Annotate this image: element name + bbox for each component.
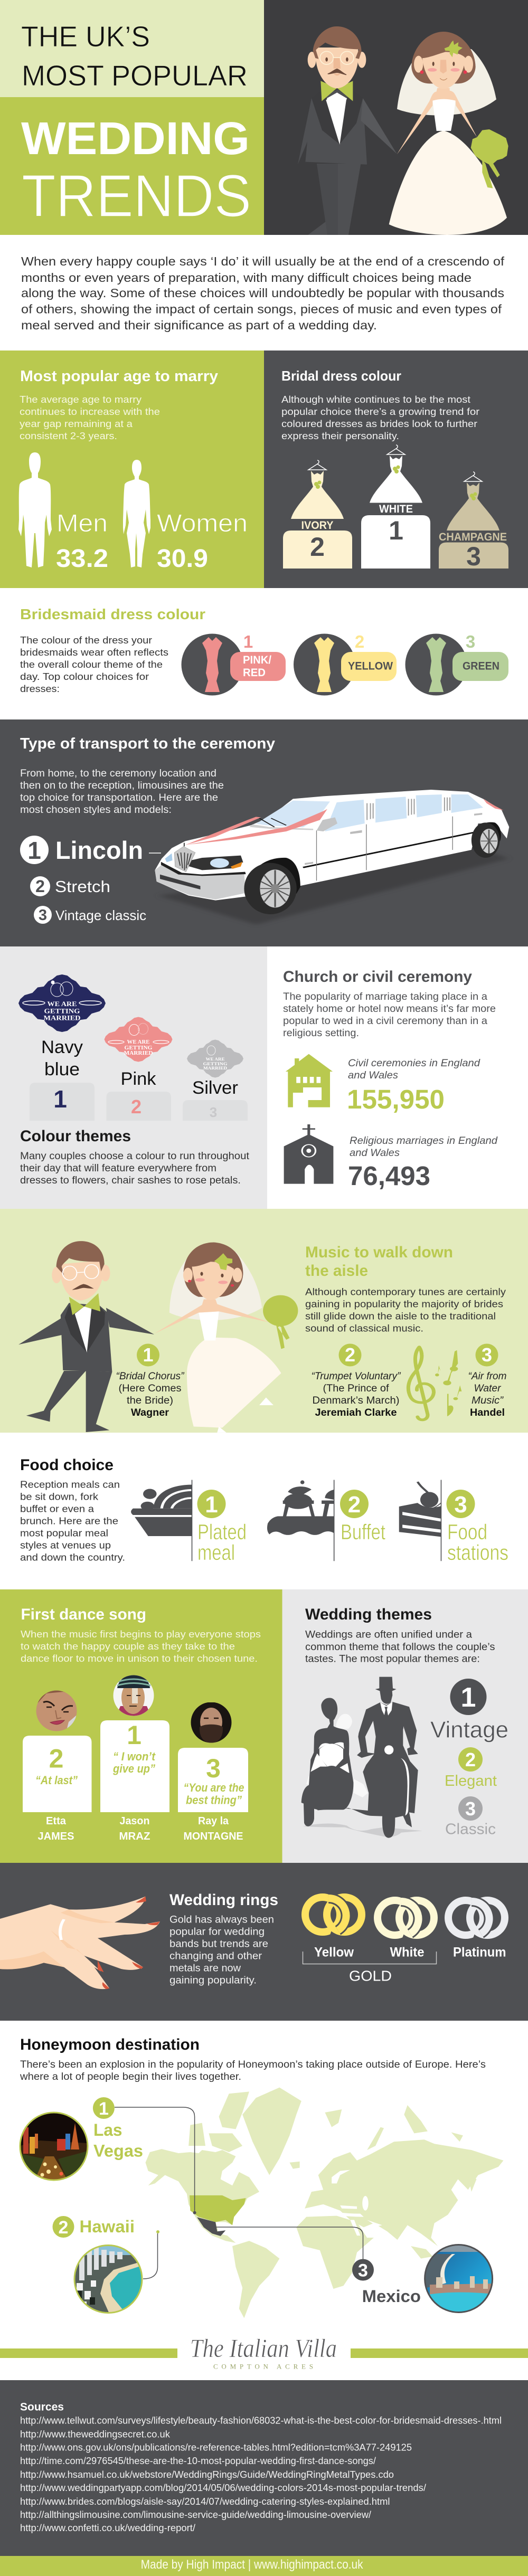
title line: The UK's: THE UK’S	[21, 20, 150, 53]
badge: silver	[183, 1040, 248, 1121]
body text: gaining popularity.	[169, 1975, 257, 1986]
track 1: Wagner: “Bridal Chorus”	[116, 1371, 185, 1382]
body text: continues to increase with the	[20, 406, 160, 417]
theme 2: elegant	[445, 1747, 497, 1789]
map highlight: USA	[190, 2195, 246, 2225]
badge: navy blue: WE ARE	[48, 1000, 77, 1008]
rank 1: Lincoln	[20, 836, 161, 864]
body text	[305, 1629, 495, 1665]
podium: white dress rank 1: 1	[389, 516, 403, 545]
track 1: Wagner: 1	[143, 1344, 154, 1366]
podium: Jason Mraz, I won't give up	[100, 1720, 169, 1842]
icon: house	[286, 1054, 333, 1107]
body text: their day that will feature everywhere from	[20, 1163, 216, 1174]
body text: sound of classical music.	[305, 1323, 423, 1333]
badge: navy blue: blue	[44, 1059, 80, 1079]
body text: brunch. Here are the	[20, 1515, 118, 1527]
body text: most chosen styles and models:	[20, 804, 172, 816]
icon: cake	[399, 1480, 441, 1561]
body text: dresses to flowers, chair sashes to rose petals.	[20, 1175, 241, 1186]
body text	[20, 394, 160, 441]
body text: most popular meal	[20, 1528, 108, 1538]
track 3: Handel: 3	[482, 1344, 492, 1366]
option: pink/red dress: PINK/	[243, 654, 271, 666]
podium: Etta James, At last: 2	[49, 1744, 63, 1774]
track 1: Wagner: (Here Comes	[118, 1383, 182, 1394]
badge: navy blue: GETTING	[44, 1007, 80, 1015]
section: honeymoon destination	[20, 2036, 503, 2318]
option: buffet: 2	[348, 1492, 361, 1518]
badge: silver: Silver	[192, 1078, 238, 1098]
body text: bridesmaids wear often reflects	[20, 647, 168, 658]
body text: The average age to marry	[20, 394, 142, 405]
track 2: Jeremiah Clarke: Jeremiah Clarke	[315, 1407, 397, 1418]
podium: champagne dress rank 3	[439, 472, 508, 571]
heading: Most popular age to marry	[20, 368, 218, 385]
body text: popular choice there’s a growing trend for	[281, 406, 479, 417]
track 3: Handel: Water	[474, 1383, 501, 1394]
header panel: title	[0, 0, 264, 235]
panel: wedding rings	[0, 1863, 528, 2021]
title line: Most Popular: MOST POPULAR	[22, 59, 248, 92]
body text: dance floor to move in unison to their chosen tune.	[21, 1653, 258, 1664]
podium: Jason Mraz, I won't give up: give up”	[112, 1762, 155, 1775]
theme 3: classic: Classic	[445, 1821, 496, 1838]
body text	[283, 991, 496, 1039]
stat: religious marriages	[348, 1135, 498, 1191]
option: pink/red dress	[182, 632, 286, 696]
rank 2: Stretch	[30, 876, 110, 896]
icon: white gold rings	[378, 1900, 434, 1936]
podium: ivory dress rank 2	[283, 460, 352, 569]
body text	[20, 2059, 486, 2082]
destination 3: Mexico: 3	[358, 2260, 368, 2280]
logo wordmark: The Italian Villa	[190, 2333, 337, 2363]
body text: buffet or even a	[20, 1503, 95, 1514]
badge: silver: 3	[210, 1104, 217, 1120]
body text: The colour of the dress your	[20, 634, 152, 646]
body text: where a lot of people begin their lives together.	[20, 2071, 241, 2082]
logo tagline: COMPTON ACRES	[213, 2363, 313, 2371]
track 1: Wagner: Wagner	[131, 1407, 169, 1418]
body text: consistent 2-3 years.	[20, 430, 117, 441]
body text: There’s been an explosion in the popularity of Honeymoon’s taking place outside of Europe. Here’s	[20, 2059, 486, 2070]
intro paragraph: of others, showing the impact of certain songs, pieces of music and even types of	[21, 302, 502, 316]
stat: civil ceremonies	[347, 1058, 481, 1114]
podium: Jason Mraz, I won't give up: “ I won’t	[113, 1750, 156, 1763]
body text: Many couples choose a colour to run throughout	[20, 1151, 250, 1162]
body text: Although contemporary tunes are certainly	[305, 1286, 506, 1298]
podium: white dress rank 1: WHITE	[379, 503, 413, 515]
podium: ivory dress rank 2: 2	[310, 532, 325, 562]
panel: type of transport to the ceremony	[0, 719, 528, 946]
body text: The popularity of marriage taking place in a	[283, 991, 487, 1002]
heading: Honeymoon destination	[20, 2036, 200, 2053]
intro paragraph: months or even years of preparation, with many difficult choices being made	[21, 271, 472, 285]
body text	[305, 1286, 506, 1333]
podium: Ray la Montagne, You are the best thing: “You are the	[184, 1781, 244, 1794]
badge: pink: WE ARE	[127, 1039, 150, 1045]
intro paragraph	[21, 254, 505, 332]
theme 1: vintage: Vintage	[430, 1717, 508, 1743]
photo: Mexico	[425, 2244, 493, 2315]
icon: woman silhouette	[123, 460, 150, 567]
rank 3: Vintage classic: 3	[39, 907, 47, 924]
logo band: The Italian Villa	[0, 2333, 528, 2371]
body text: changing and other	[169, 1951, 262, 1962]
source list: http://www.ons.gov.uk/ons/publications/re-reference-tables.html?edition=tcm%3A77-249125	[20, 2442, 412, 2453]
body text: Weddings are often unified under a	[305, 1629, 472, 1641]
badge: navy blue	[18, 974, 106, 1121]
body text	[169, 1915, 274, 1986]
world map	[146, 2087, 503, 2318]
stat: religious marriages: and Wales	[350, 1148, 400, 1159]
badge: navy blue: 1	[53, 1085, 67, 1113]
section: bridesmaid dress colour	[20, 606, 508, 696]
panel: wedding themes	[282, 1589, 528, 1863]
icon: music notes	[408, 1347, 461, 1420]
footer credit bar	[0, 2556, 528, 2576]
source list: http://www.weddingpartyapp.com/blog/2014/05/06/wedding-colors-2014s-most-popular-trends/	[20, 2482, 427, 2493]
badge: pink: Pink	[120, 1069, 157, 1089]
badge: pink	[105, 1017, 172, 1121]
body text: styles at venues up	[20, 1539, 111, 1551]
icon: church	[284, 1124, 333, 1184]
rank 3: Vintage classic: Vintage classic	[55, 907, 146, 923]
option: pink/red dress: RED	[243, 667, 266, 679]
option: yellow dress: 2	[355, 632, 364, 651]
stat: women age: 30.9	[157, 545, 208, 573]
body text: common theme that follows the couple’s	[305, 1642, 495, 1653]
heading: Sources	[20, 2401, 64, 2413]
track 1: Wagner: the Bride)	[127, 1395, 173, 1406]
map highlight: Mexico	[197, 2217, 225, 2236]
body text	[20, 1151, 250, 1186]
connector: Mexico	[215, 2227, 363, 2259]
body text: year gap remaining at a	[20, 418, 133, 429]
option: yellow dress	[294, 632, 397, 696]
destination 2: Hawaii: 2	[59, 2218, 68, 2238]
heading: Bridal dress colour	[281, 368, 401, 384]
podium: ivory dress rank 2: IVORY	[301, 519, 334, 532]
stat: civil ceremonies: 155,950	[347, 1084, 445, 1114]
marker: Las Vegas	[193, 2211, 196, 2214]
stat: civil ceremonies: and Wales	[348, 1070, 399, 1081]
badge: silver: GETTING	[203, 1061, 228, 1066]
header panel: illustrated couple	[264, 0, 528, 235]
body text: day. Top colour choices for	[20, 671, 149, 682]
option: plated meal: Plated	[197, 1520, 247, 1544]
body text: be sit down, fork	[20, 1491, 99, 1502]
podium: champagne dress rank 3: 3	[466, 542, 481, 571]
body text: Although white continues to be the most	[281, 394, 470, 405]
panel: sources	[0, 2380, 528, 2556]
destination 3: Mexico: Mexico	[362, 2287, 421, 2306]
heading: Type of transport to the ceremony	[20, 735, 275, 752]
body text: tastes. The most popular themes are:	[305, 1653, 480, 1665]
option: green dress: 3	[466, 632, 475, 651]
option: green dress: GREEN	[463, 660, 499, 673]
track 2: Jeremiah Clarke: (The Prince of	[323, 1383, 389, 1394]
intro paragraph: When every happy couple says ‘I do’ it will usually be at the end of a crescendo of	[21, 254, 505, 268]
label: white: White	[390, 1945, 425, 1960]
source list: http://www.theweddingsecret.co.uk	[20, 2429, 171, 2440]
badge: pink: GETTING	[125, 1045, 153, 1051]
heading second line: the aisle	[305, 1262, 368, 1280]
theme 3: classic: 3	[465, 1798, 476, 1820]
source list: http://www.brides.com/blogs/aisle-say/2014/07/wedding-catering-styles-explained.html	[20, 2496, 390, 2507]
option: buffet: Buffet	[341, 1520, 385, 1544]
badge: navy blue: MARRIED	[43, 1014, 80, 1022]
section: church or civil ceremony	[283, 968, 498, 1191]
body text: From home, to the ceremony location and	[20, 768, 216, 779]
source list: http://time.com/2976545/these-are-the-10-most-popular-wedding-first-dance-songs/	[20, 2455, 376, 2466]
track 1: Wagner	[116, 1344, 185, 1418]
body text	[20, 634, 168, 694]
track 3: Handel: Handel	[470, 1407, 505, 1418]
badge: pink: MARRIED	[124, 1050, 153, 1056]
body text: coloured dresses as brides look to further	[281, 418, 477, 429]
body text: still glide down the aisle to the traditional	[305, 1310, 496, 1322]
stat: religious marriages: 76,493	[348, 1161, 430, 1191]
track 3: Handel	[468, 1344, 507, 1418]
rank 1: Lincoln: Lincoln	[55, 836, 143, 864]
rank 2: Stretch: Stretch	[55, 877, 110, 896]
podium: Ray la Montagne, You are the best thing: best thing”	[186, 1794, 242, 1806]
theme 1: vintage	[430, 1679, 508, 1743]
body text: When the music first begins to play everyone stops	[21, 1628, 261, 1640]
body text: metals are now	[169, 1963, 241, 1974]
option: food stations	[447, 1490, 508, 1565]
destination 3: Mexico	[352, 2259, 421, 2306]
destination 1: Las Vegas	[93, 2097, 143, 2161]
option: buffet	[340, 1490, 385, 1544]
option: yellow dress: YELLOW	[348, 660, 393, 673]
heading: Music to walk down	[305, 1244, 453, 1261]
label: gold: GOLD	[349, 1968, 392, 1984]
badge: navy blue: Navy	[41, 1037, 83, 1057]
option: plated meal: 1	[205, 1492, 218, 1518]
destination 2: Hawaii: Hawaii	[79, 2217, 135, 2236]
panel: colour themes	[0, 946, 267, 1209]
icon: platinum rings	[448, 1900, 505, 1936]
option: plated meal	[197, 1490, 247, 1565]
illustration: white limousine	[155, 790, 509, 925]
podium: white dress rank 1	[361, 445, 430, 569]
track 2: Jeremiah Clarke	[312, 1344, 401, 1418]
label: men: Men	[56, 509, 108, 537]
portrait: Ray LaMontagne	[191, 1702, 232, 1744]
theme 2: elegant: Elegant	[445, 1773, 497, 1789]
track 2: Jeremiah Clarke: Denmark’s March)	[313, 1395, 399, 1406]
body text: Gold has always been	[169, 1915, 274, 1926]
rank 2: Stretch: 2	[35, 877, 45, 896]
option: plated meal: meal	[197, 1540, 235, 1565]
panel: music to walk down the aisle	[0, 1209, 528, 1433]
body text: to watch the happy couple as they take to the	[21, 1641, 235, 1652]
heading: First dance song	[21, 1606, 146, 1623]
source list: http://allthingslimousine.com/limousine-service-guide/wedding-limousine-overview/	[20, 2509, 372, 2520]
destination 1: Las Vegas: Las	[93, 2120, 122, 2139]
label: platinum: Platinum	[453, 1945, 506, 1960]
heading: Bridesmaid dress colour	[20, 606, 205, 622]
theme 2: elegant: 2	[465, 1749, 476, 1770]
podium: champagne dress rank 3: CHAMPAGNE	[439, 531, 507, 543]
podium: Ray la Montagne, You are the best thing: MONTAGNE	[184, 1831, 243, 1842]
theme 3: classic	[445, 1796, 496, 1838]
stat: men age: 33.2	[56, 545, 108, 573]
destination 2: Hawaii	[53, 2216, 135, 2238]
track 3: Handel: “Air from	[468, 1371, 507, 1382]
body text: religious setting.	[283, 1028, 359, 1039]
footer credit bar: Made by High Impact | www.highimpact.co.uk	[141, 2558, 363, 2572]
bracket: gold	[303, 1952, 436, 1964]
panel: bridal dress colour	[264, 351, 528, 588]
podium: Jason Mraz, I won't give up: 1	[127, 1720, 142, 1750]
source list: http://www.hsamuel.co.uk/webstore/WeddingRings/Guide/WeddingRingMetalTypes.cdo	[20, 2469, 394, 2480]
body text: popular for wedding	[169, 1927, 265, 1938]
rank 1: Lincoln: 1	[27, 837, 41, 864]
body text: express their personality.	[281, 430, 399, 441]
podium: Etta James, At last	[23, 1736, 92, 1842]
source list: http://www.confetti.co.uk/wedding-report/	[20, 2522, 196, 2533]
body text	[281, 394, 479, 441]
track 3: Handel: Music”	[472, 1395, 504, 1406]
panel: most popular age to marry	[0, 351, 264, 588]
heading: Wedding themes	[305, 1606, 432, 1623]
body text: Reception meals can	[20, 1479, 120, 1490]
stat: religious marriages: Religious marriages in England	[350, 1135, 498, 1147]
podium: Etta James, At last: “At last”	[35, 1774, 78, 1787]
podium: Ray la Montagne, You are the best thing: 3	[206, 1754, 221, 1783]
icon: man silhouette	[18, 452, 52, 567]
portrait: Etta James	[36, 1690, 79, 1732]
title line: Wedding: WEDDING	[21, 113, 250, 164]
body text: and down the country.	[20, 1552, 125, 1562]
heading: Church or civil ceremony	[283, 968, 472, 986]
podium: Ray la Montagne, You are the best thing: Ray la	[198, 1815, 229, 1827]
illustration: couple on scooter with sidecar	[301, 1677, 422, 1838]
photo: Las Vegas	[20, 2113, 88, 2180]
option: food stations: 3	[454, 1492, 467, 1518]
photo: Hawaii	[74, 2245, 142, 2315]
label: yellow: Yellow	[314, 1945, 354, 1960]
illustration: groom walking	[18, 1241, 154, 1432]
body text: popular to wed in a civil ceremony than in a	[283, 1016, 487, 1027]
badge: silver: WE ARE	[206, 1056, 225, 1062]
body text: top choice for transportation. Here are the	[20, 792, 218, 803]
source list	[20, 2415, 502, 2533]
connector: Hawaii	[143, 2233, 157, 2279]
intro paragraph: meal served and their significance as part of a wedding day.	[21, 318, 377, 332]
body text: the overall colour theme of the	[20, 659, 163, 670]
body text: gaining in popularity the majority of brides	[305, 1299, 503, 1309]
icon: yellow gold rings	[305, 1897, 362, 1933]
body text: dresses:	[20, 683, 60, 694]
option: food stations: Food	[447, 1520, 487, 1544]
destination 1: Las Vegas: Vegas	[93, 2142, 143, 2161]
body text	[21, 1628, 261, 1664]
body text: stately home or hotel now means it’s far more	[283, 1003, 496, 1015]
podium: Jason Mraz, I won't give up: MRAZ	[119, 1831, 150, 1842]
podium: Etta James, At last: Etta	[46, 1815, 67, 1827]
icon: plated meal	[131, 1480, 192, 1561]
icon: buffet	[267, 1480, 334, 1561]
body text: then on to the reception, limousines are the	[20, 780, 224, 791]
badge: pink: 2	[131, 1096, 142, 1117]
label: women: Women	[157, 509, 248, 537]
body text: bands but trends are	[169, 1939, 268, 1950]
portrait: Jason Mraz	[113, 1674, 154, 1716]
heading: Food choice	[20, 1456, 114, 1474]
illustration: hand with ring	[0, 1897, 160, 1989]
marker: Hawaii	[156, 2230, 159, 2233]
track 2: Jeremiah Clarke: “Trumpet Voluntary”	[312, 1371, 401, 1382]
heading: Colour themes	[20, 1128, 131, 1145]
option: food stations: stations	[447, 1540, 508, 1565]
theme 1: vintage: 1	[461, 1682, 476, 1713]
podium: Jason Mraz, I won't give up: Jason	[119, 1815, 150, 1827]
destination 1: Las Vegas: 1	[99, 2099, 109, 2119]
option: pink/red dress: 1	[243, 632, 253, 651]
panel: first dance song	[0, 1589, 282, 1863]
body text	[20, 768, 224, 816]
illustration: bride walking	[154, 1242, 298, 1433]
badge: silver: MARRIED	[203, 1065, 227, 1071]
title line: Trends: TRENDS	[22, 163, 251, 229]
intro paragraph: along the way. Some of these choices will undoubtedly be popular with thousands	[21, 286, 504, 300]
option: green dress	[406, 632, 508, 696]
connector: Las Vegas	[115, 2107, 195, 2213]
body text	[20, 1479, 125, 1562]
source list: http://www.tellwut.com/surveys/lifestyle/beauty-fashion/68032-what-is-the-best-color-for-bridesmaid-dresses-.html	[20, 2415, 502, 2426]
podium: Ray la Montagne, You are the best thing	[178, 1748, 248, 1842]
stat: civil ceremonies: Civil ceremonies in England	[348, 1058, 481, 1069]
illustration: bride	[389, 32, 508, 235]
section: food choice	[20, 1456, 508, 1565]
track 2: Jeremiah Clarke: 2	[345, 1344, 355, 1366]
illustration: groom	[298, 26, 397, 235]
podium: Etta James, At last: JAMES	[38, 1831, 74, 1842]
heading: Wedding rings	[169, 1891, 278, 1909]
